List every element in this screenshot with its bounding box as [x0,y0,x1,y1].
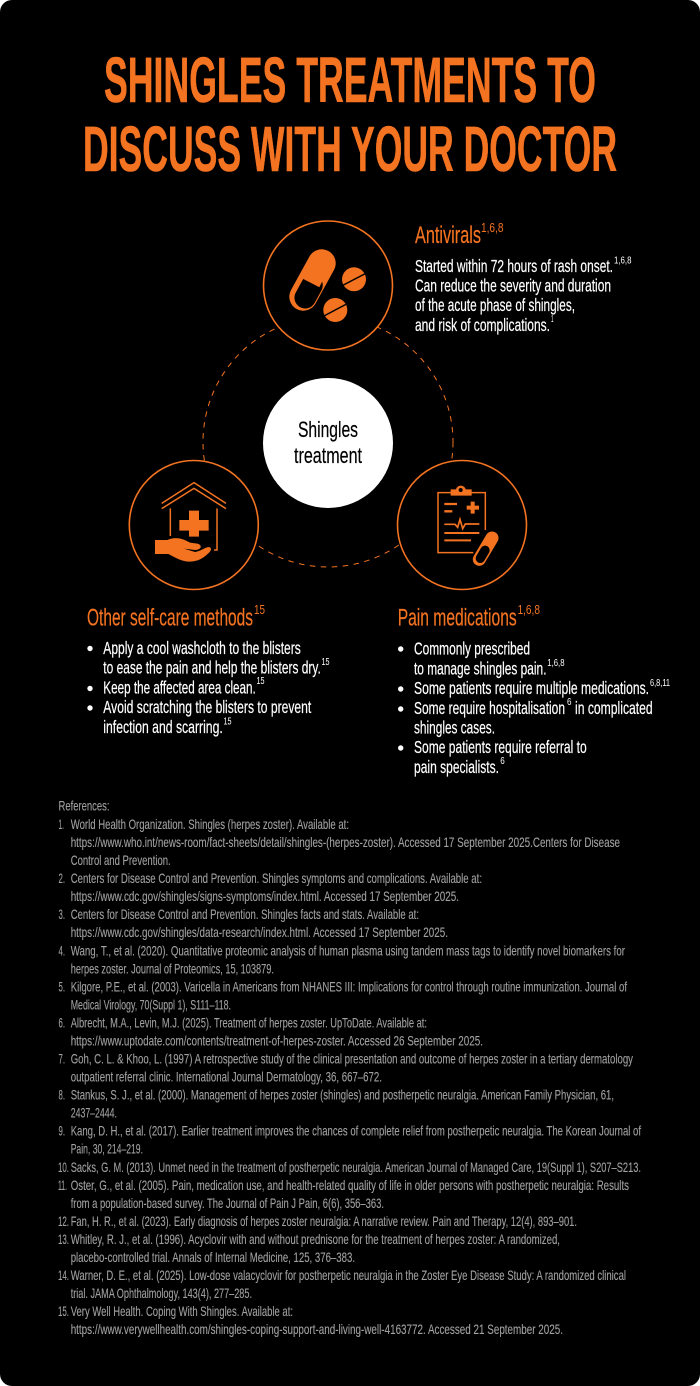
list: pain medication bullets: pain specialists. [414,757,499,777]
icon: antivirals pills [264,221,392,350]
references: Centers for Disease Control and Prevention. Shingles symptoms and complications. Available at: [71,870,482,886]
references: Control and Prevention. [71,852,171,868]
references: https://www.cdc.gov/shingles/signs-symptoms/index.html. Accessed 17 September 2025. [71,888,459,904]
text: antivirals description: Can reduce the severity and duration [415,276,611,296]
references: Centers for Disease Control and Prevention. Shingles facts and stats. Available at: [71,906,419,922]
references: World Health Organization. Shingles (herpes zoster). Available at: [71,816,349,832]
centre circle: shingles treatment: treatment [294,443,363,468]
text: antivirals description: 1 [551,314,554,325]
title [83,44,617,185]
list: pain medication bullets: shingles cases. [414,718,495,738]
references: 10. [58,1159,69,1175]
list: pain medication bullets: 6 [500,756,505,767]
list: pain medication bullets: 6 [567,697,572,708]
references: Albrecht, M.A., Levin, M.J. (2025). Treatment of herpes zoster. UpToDate. Available at: [71,1014,427,1030]
list: self-care bullets: 15 [322,657,330,668]
references: 1. [58,816,64,832]
text: antivirals description: Started within 72 hours of rash onset. [415,256,613,276]
heading: antivirals: Antivirals [415,222,481,249]
list: pain medication bullets: Some require hospitalisation [414,698,565,718]
references: 3. [58,906,65,922]
list: pain medication bullets: 1,6,8 [547,658,565,669]
references: 13. [58,1231,69,1247]
text: antivirals description: and risk of complications. [415,315,550,335]
references: Pain, 30, 214–219. [71,1140,143,1156]
icon: home care hand [129,460,258,590]
list: self-care bullets [87,638,330,737]
references: References: [58,798,110,814]
list: pain medication bullets [398,638,670,777]
references: 7. [58,1050,65,1066]
references: Medical Virology, 70(Suppl 1), S111–118. [71,996,231,1012]
references: from a population-based survey. The Journal of Pain J Pain, 6(6), 356–363. [71,1195,384,1211]
list: pain medication bullets: 6,8,11 [650,678,670,689]
list: pain medication bullets: in complicated [575,698,653,718]
list: pain medication bullets: Commonly prescribed [414,638,530,658]
references: 2. [58,870,65,886]
heading: pain medications: Pain medications [398,604,517,632]
heading: other self-care methods [87,603,265,632]
heading: antivirals: 1,6,8 [481,221,504,235]
list: self-care bullets: 15 [224,716,232,728]
references: Very Well Health. Coping With Shingles. Available at: [71,1303,293,1319]
icon: clipboard and capsule [398,460,526,590]
references: 11. [58,1177,67,1193]
references: 9. [58,1122,65,1138]
references: https://www.cdc.gov/shingles/data-research/index.html. Accessed 17 September 2025. [71,924,448,940]
list: self-care bullets: to ease the pain and help the blisters dry. [103,658,321,678]
text: antivirals description: 1,6,8 [614,256,632,266]
references: placebo-controlled trial. Annals of Internal Medicine, 125, 376–383. [71,1249,355,1265]
references: 15. [58,1303,69,1319]
panel: antivirals [415,221,632,335]
references: 14. [58,1267,69,1283]
references: https://www.uptodate.com/contents/treatment-of-herpes-zoster. Accessed 26 September 2025. [71,1032,483,1048]
list: self-care bullets: 15 [256,676,265,687]
heading: other self-care methods: Other self-care methods [87,604,253,632]
references: outpatient referral clinic. International Journal Dermatology, 36, 667–672. [71,1068,382,1084]
references: herpes zoster. Journal of Proteomics, 15, 103879. [71,960,274,976]
references: 6. [58,1014,65,1030]
text: antivirals description: of the acute phase of shingles, [415,295,575,315]
heading: other self-care methods: 15 [254,603,265,617]
list: self-care bullets: Avoid scratching the blisters to prevent [103,697,311,717]
references: 8. [58,1086,65,1102]
references: trial. JAMA Ophthalmology, 143(4), 277–285. [71,1285,252,1301]
references: 12. [58,1213,69,1229]
heading: pain medications: 1,6,8 [518,603,540,617]
references: 5. [58,978,65,994]
centre circle: shingles treatment: Shingles [298,417,358,442]
diagram: treatment cycle [129,221,527,590]
references: 4. [58,942,65,958]
list: self-care bullets: infection and scarring. [103,717,223,737]
panel: other self-care methods [87,603,330,737]
text: antivirals description [415,256,632,335]
list: pain medication bullets: Some patients require referral to [414,737,587,757]
list: pain medication bullets: to manage shingles pain. [414,658,546,678]
references [58,798,641,1337]
list: self-care bullets: Keep the affected area clean. [103,678,256,698]
list: self-care bullets: Apply a cool washcloth to the blisters [103,638,301,658]
panel: pain medications [398,603,670,777]
references: 2437–2444. [71,1104,117,1120]
centre circle: shingles treatment [263,378,393,508]
